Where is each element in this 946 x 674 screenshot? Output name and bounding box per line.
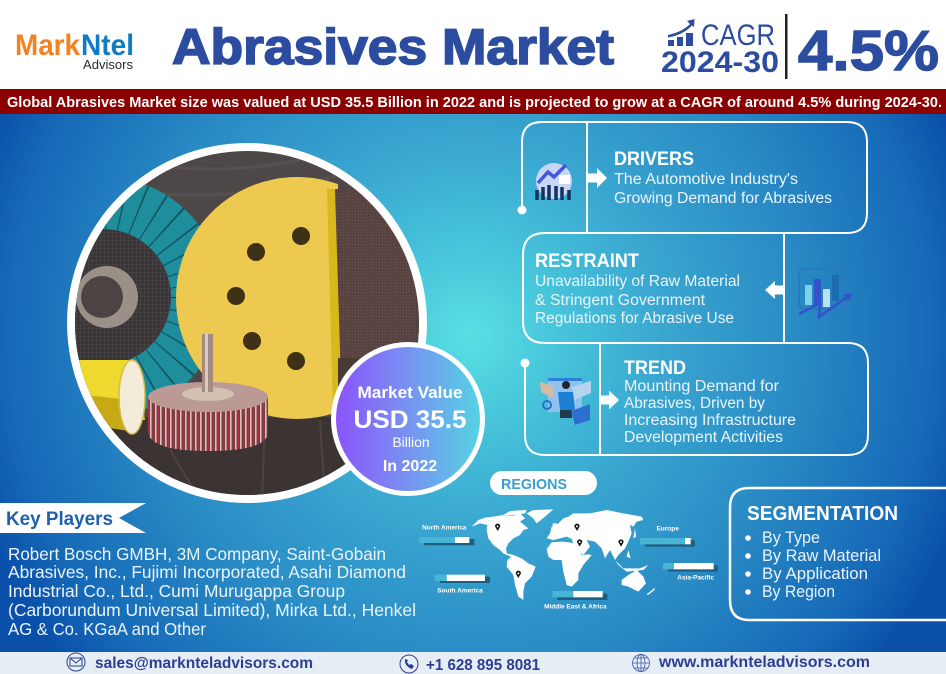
key players list xyxy=(8,544,416,639)
table xyxy=(103,417,346,495)
restraint text: Unavailability of Raw Material xyxy=(535,273,740,290)
restraint text: RESTRAINT xyxy=(535,251,639,272)
trend text: Increasing Infrastructure xyxy=(624,412,796,429)
logo: MarkNtel Advisors: Ntel xyxy=(81,29,134,62)
sanding sponge xyxy=(338,177,355,189)
CAGR block xyxy=(661,14,939,83)
bar: Asia-Pacific xyxy=(663,563,718,581)
regions heading: REGIONS xyxy=(501,476,567,493)
bar: Europe xyxy=(640,526,695,547)
bar: North America xyxy=(419,524,474,545)
photo: abrasive products in circle xyxy=(67,143,427,503)
logo: MarkNtel Advisors xyxy=(15,29,134,72)
bar: Asia-Pacific: Asia-Pacific xyxy=(677,574,714,581)
footer: phone: +1 628 895 8081 xyxy=(426,657,540,674)
footer: website: www.marknteladvisors.com xyxy=(658,654,870,671)
market value badge: Billion xyxy=(392,434,430,450)
key players list: Abrasives, Inc., Fujimi Incorporated, Asahi Diamond xyxy=(8,562,406,582)
panel: restraint xyxy=(523,233,852,343)
drivers text xyxy=(614,149,832,207)
arrow: restraint xyxy=(765,281,784,299)
location pins xyxy=(495,524,624,578)
logo: MarkNtel Advisors: Advisors xyxy=(83,57,133,72)
regions heading xyxy=(490,471,597,495)
CAGR block: 4.5% xyxy=(798,19,939,83)
bar: Middle East and Africa xyxy=(544,591,607,610)
yellow roll xyxy=(79,360,145,420)
market value badge: In 2022 xyxy=(383,458,437,475)
flap disc xyxy=(75,184,200,417)
logo: MarkNtel Advisors: Mark xyxy=(15,29,80,62)
key players ribbon: Key Players xyxy=(6,509,113,530)
trend text: Development Activities xyxy=(624,429,783,446)
restraint text: & Stringent Government xyxy=(535,292,706,309)
CAGR block: 2024-30 xyxy=(661,46,779,79)
bar: South America: South America xyxy=(437,587,483,594)
trend text xyxy=(624,358,796,446)
title: Abrasives Market xyxy=(172,19,614,75)
panel: segmentation: By Raw Material xyxy=(762,546,881,565)
key players ribbon xyxy=(0,503,146,533)
icon: growth chart xyxy=(668,19,694,46)
panel: drivers xyxy=(518,122,867,233)
bar: South America xyxy=(435,575,490,594)
footer: email: sales@marknteladvisors.com xyxy=(95,655,313,672)
panel: segmentation: By Region xyxy=(762,582,835,601)
bar: Middle East and Africa: Middle East & Africa xyxy=(544,603,607,610)
market value badge xyxy=(334,344,482,494)
icon: trend person with screens xyxy=(540,378,591,425)
drivers text: Growing Demand for Abrasives xyxy=(614,190,832,207)
summary banner: Global Abrasives Market size was valued at USD 35.5 Billion in 2022 and is projected to grow at a CAGR of around 4.5% during 2024-30. xyxy=(7,94,942,111)
drivers text: DRIVERS xyxy=(614,149,694,170)
panel: segmentation: By Type xyxy=(762,528,820,547)
key players list: Industrial Co., Ltd., Cumi Murugappa Group xyxy=(8,581,345,601)
main gradient background xyxy=(0,114,946,652)
trend text: TREND xyxy=(624,358,686,379)
panel: segmentation: By Application xyxy=(762,564,868,583)
restraint text xyxy=(535,251,740,327)
arrow: trend xyxy=(600,390,619,410)
map landmasses xyxy=(472,509,655,600)
key players list: (Carborundum Universal Limited), Mirka Ltd., Henkel xyxy=(8,600,416,620)
drivers text: The Automotive Industry's xyxy=(614,171,798,188)
arrow: drivers xyxy=(587,168,607,188)
world map with regional bars xyxy=(419,509,718,610)
icon: drivers people and growth chart xyxy=(536,163,572,200)
key players list: AG & Co. KGaA and Other xyxy=(8,619,206,639)
icon: restraint bar chart xyxy=(799,269,852,317)
summary banner xyxy=(0,89,946,114)
key players list: Robert Bosch GMBH, 3M Company, Saint-Gobain xyxy=(8,544,386,564)
CAGR block: CAGR xyxy=(701,19,775,52)
panel: segmentation xyxy=(730,488,946,620)
yellow sanding disc xyxy=(176,177,418,419)
bar: Europe: Europe xyxy=(656,526,679,533)
footer bar xyxy=(0,652,946,674)
header background xyxy=(0,0,946,89)
bar: North America: North America xyxy=(422,524,467,531)
market value badge: USD 35.5 xyxy=(354,406,467,434)
market value badge: Market Value xyxy=(358,383,462,402)
trend text: Mounting Demand for xyxy=(624,378,779,395)
panel: segmentation: SEGMENTATION xyxy=(747,503,898,525)
flap wheel xyxy=(148,398,268,451)
panel: trend xyxy=(520,343,868,455)
trend text: Abrasives, Driven by xyxy=(624,395,765,412)
restraint text: Regulations for Abrasive Use xyxy=(535,310,734,327)
